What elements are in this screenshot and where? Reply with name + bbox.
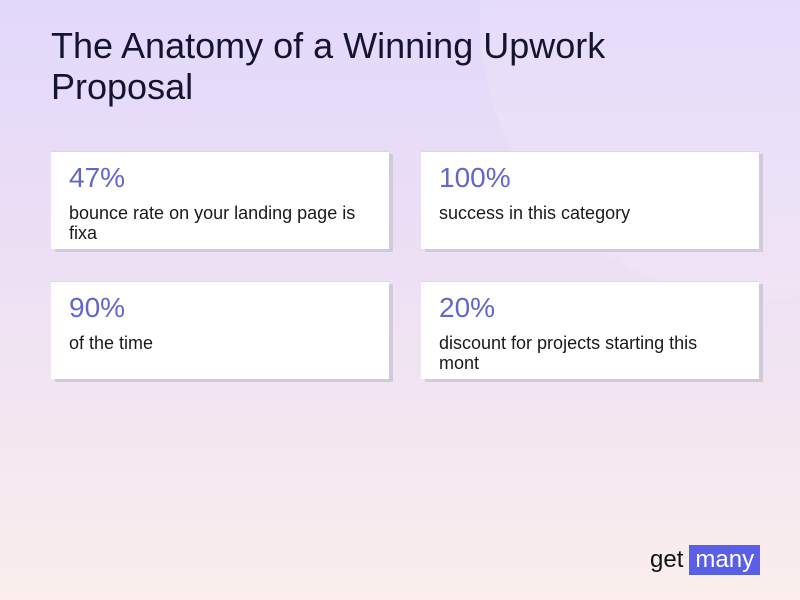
stat text: success in this category <box>439 203 630 223</box>
logo <box>650 545 760 575</box>
stat number: 90% <box>69 292 125 323</box>
stat text: bounce rate on your landing page is fixa <box>69 203 355 243</box>
card: 47% <box>51 151 389 249</box>
stat text: discount for projects starting this mont <box>439 333 697 373</box>
card: 20% <box>421 281 759 379</box>
logo: get <box>650 546 683 573</box>
stat text: of the time <box>69 333 153 353</box>
title: The Anatomy of a Winning Upwork Proposal <box>51 25 605 107</box>
stat number: 20% <box>439 292 495 323</box>
stat number: 47% <box>69 162 125 193</box>
card: 90% <box>51 281 389 379</box>
logo: many <box>695 546 754 573</box>
stat number: 100% <box>439 162 511 193</box>
card: 100% <box>421 151 759 249</box>
